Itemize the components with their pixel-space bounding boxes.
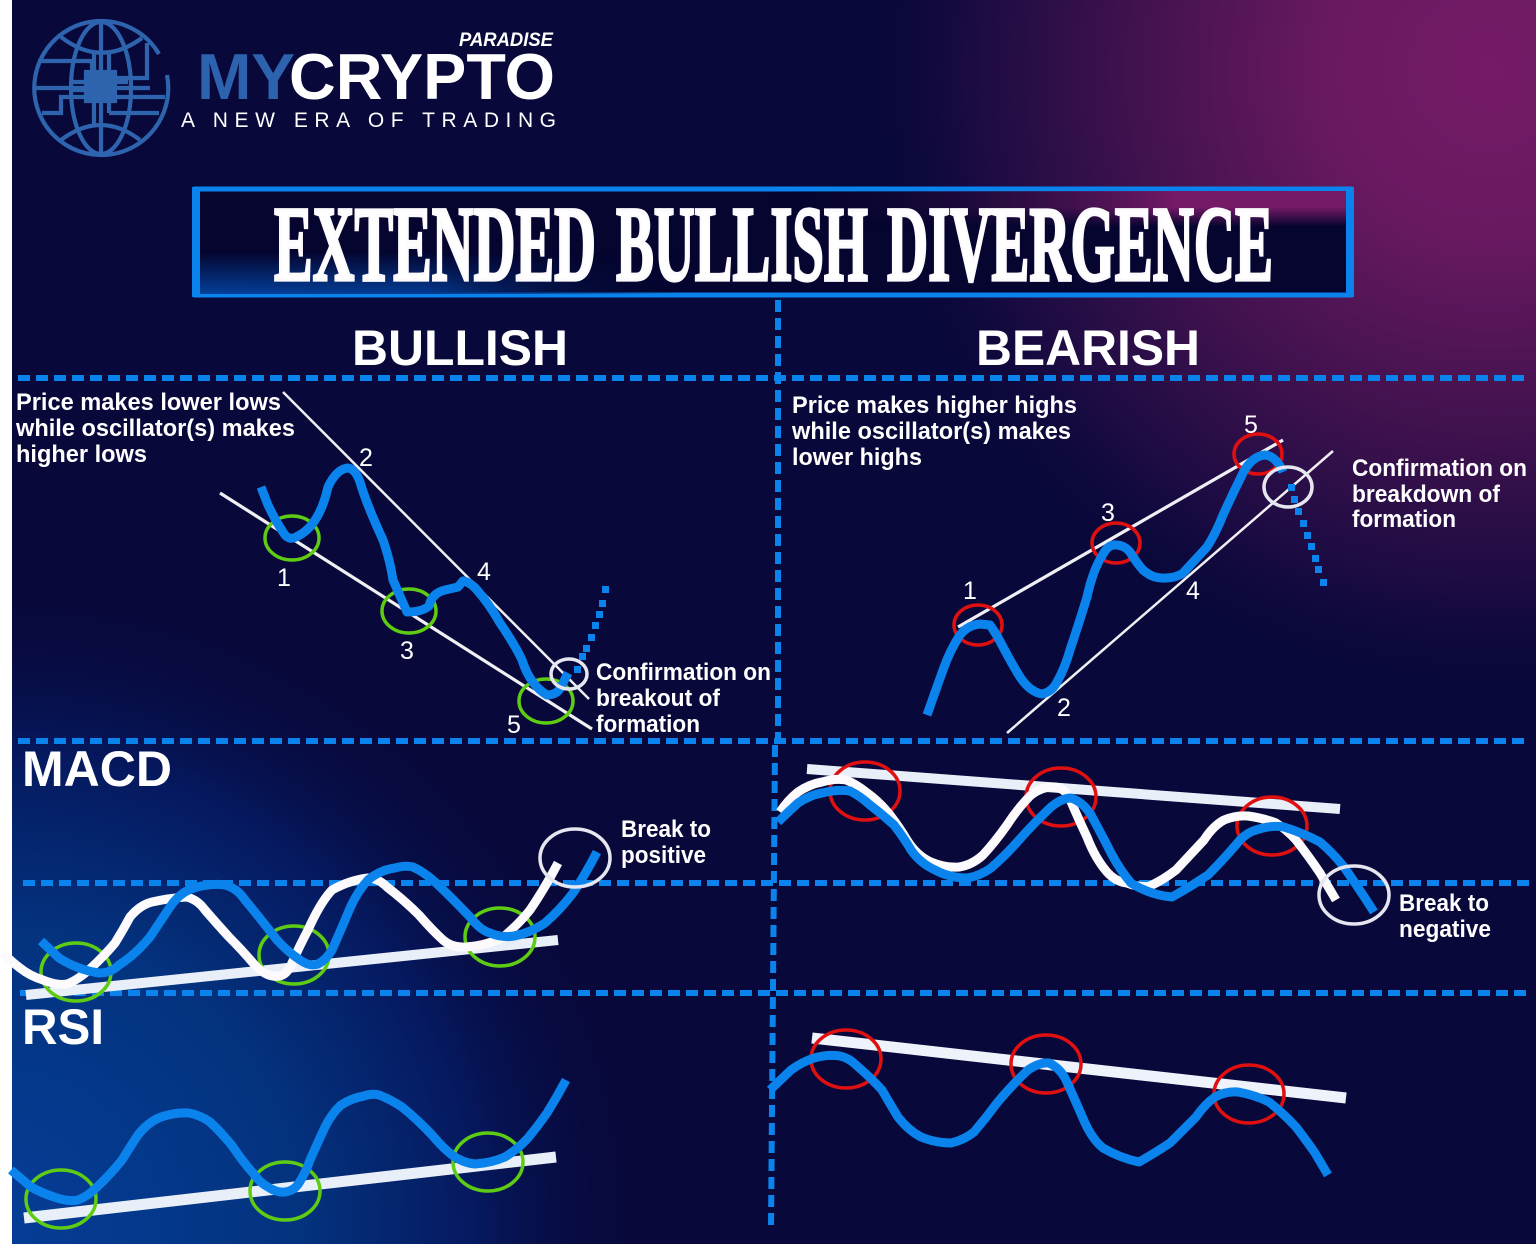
point numbers: 4 — [1186, 577, 1200, 605]
text: break to negative: negative — [1399, 916, 1491, 943]
support bar — [26, 940, 558, 995]
price line — [927, 455, 1283, 715]
point numbers: 5 — [507, 711, 521, 739]
dotted projection down — [1288, 484, 1327, 586]
point numbers: 1 — [277, 564, 291, 592]
chart: bearish MACD — [778, 762, 1389, 924]
point numbers: 3 — [1101, 499, 1115, 527]
text: bearish description: while oscillator(s) makes — [791, 418, 1071, 445]
red markers — [830, 762, 1307, 855]
heading: BULLISH: BULLISH — [352, 320, 568, 376]
point numbers — [277, 444, 521, 739]
text: break to positive: positive — [621, 842, 706, 869]
tagline: A NEW ERA OF TRADING — [181, 109, 556, 132]
chart: bullish MACD — [3, 829, 610, 1001]
price line — [261, 468, 568, 695]
breakout circle — [551, 659, 587, 689]
text: confirmation on breakout: breakout of — [596, 685, 721, 712]
text: break to negative — [1399, 890, 1491, 943]
text: confirmation on breakout: formation — [596, 711, 700, 738]
title text: BULLISH — [616, 186, 868, 304]
text: bullish description: while oscillator(s) makes — [15, 415, 295, 442]
chart: bearish price rising wedge — [927, 411, 1333, 733]
text: confirmation on breakdown: breakdown of — [1352, 481, 1501, 508]
chart: bearish RSI — [770, 1030, 1346, 1175]
white signal line — [3, 863, 558, 984]
break circle — [540, 829, 610, 887]
blue MACD line — [778, 790, 1374, 912]
RSI line — [770, 1055, 1328, 1175]
white signal line — [780, 779, 1336, 900]
logo: My Crypto Paradise — [34, 21, 556, 156]
breakdown circle — [1264, 467, 1312, 507]
green markers — [41, 908, 535, 1001]
heading: MACD: MACD — [22, 741, 172, 797]
heading: RSI: RSI — [22, 999, 104, 1055]
wordmark PARADISE: PARADISE — [459, 30, 554, 51]
text: bullish description — [15, 389, 295, 468]
wordmark MY: MY — [197, 40, 295, 113]
point numbers: 3 — [400, 637, 414, 665]
heading: BEARISH: BEARISH — [976, 320, 1200, 376]
text: bullish description: higher lows — [16, 441, 147, 468]
chart: bullish RSI — [11, 1080, 566, 1228]
text: bullish description: Price makes lower lows — [16, 389, 281, 416]
text: confirmation on breakout — [596, 659, 771, 738]
point numbers: 4 — [477, 558, 491, 586]
text: confirmation on breakdown — [1352, 455, 1527, 533]
text: bearish description: lower highs — [792, 444, 922, 471]
point numbers: 2 — [1057, 694, 1071, 722]
text: confirmation on breakdown: formation — [1352, 506, 1456, 533]
text: bearish description — [791, 392, 1077, 471]
RSI line — [11, 1080, 566, 1201]
support bar — [24, 1157, 556, 1218]
red high markers — [954, 434, 1282, 645]
title text: EXTENDED — [274, 186, 596, 304]
title text — [274, 186, 1273, 304]
title banner — [192, 186, 1354, 304]
point numbers: 2 — [359, 444, 373, 472]
text: break to negative: Break to — [1399, 890, 1489, 917]
green markers — [26, 1133, 523, 1228]
wedge trend lines — [958, 440, 1333, 733]
chart: bullish price falling wedge — [220, 392, 609, 739]
icon: circuit globe — [34, 21, 168, 156]
point numbers: 5 — [1244, 411, 1258, 439]
point numbers: 1 — [963, 577, 977, 605]
text: confirmation on breakdown: Confirmation on — [1352, 455, 1527, 482]
red markers — [811, 1030, 1284, 1123]
resistance bar — [807, 769, 1340, 809]
blue MACD line — [41, 852, 597, 973]
dotted projection up — [574, 586, 609, 673]
text: confirmation on breakout: Confirmation on — [596, 659, 771, 686]
text: break to positive: Break to — [621, 816, 711, 843]
resistance bar — [812, 1038, 1346, 1098]
wedge trend lines — [220, 392, 592, 729]
text: bearish description: Price makes higher highs — [792, 392, 1077, 419]
green low markers — [265, 516, 573, 723]
break circle — [1319, 866, 1389, 924]
text: break to positive — [621, 816, 711, 869]
wordmark CRYPTO: CRYPTO — [289, 40, 555, 113]
point numbers — [963, 411, 1258, 722]
